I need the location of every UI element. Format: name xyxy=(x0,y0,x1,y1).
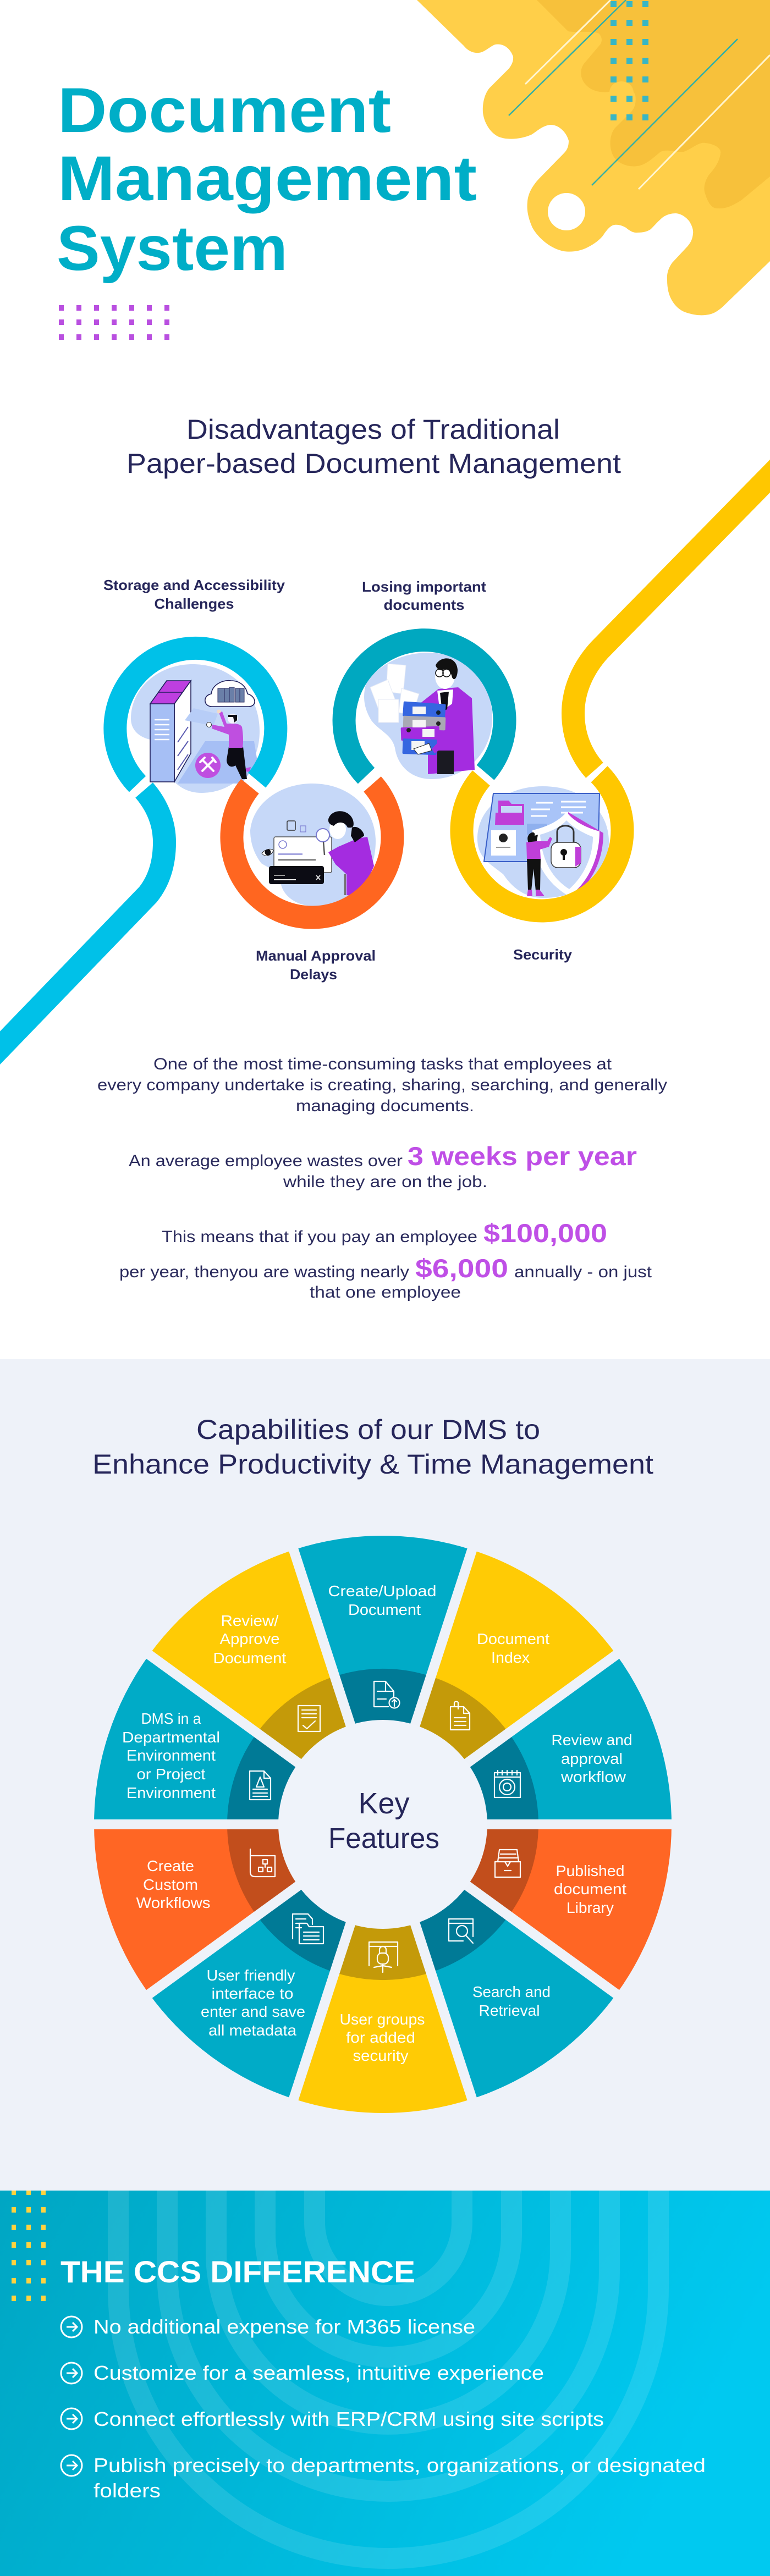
heading: disadvantages xyxy=(127,414,621,479)
wheel separators xyxy=(88,1544,678,2105)
segment: DMS in a departmental environment: Environment xyxy=(127,1784,216,1801)
segment: DMS in a departmental environment: or Project xyxy=(136,1766,206,1783)
heading: the CCS difference: THE CCS DIFFERENCE xyxy=(61,2254,415,2289)
text block: statistics xyxy=(97,1055,667,1301)
segment: user groups for added security: security xyxy=(353,2047,408,2064)
blue connector line xyxy=(0,790,164,1082)
segment: published document library xyxy=(383,1824,672,1994)
heading: capabilities xyxy=(92,1414,653,1480)
icon: documents and folder xyxy=(293,1914,323,1944)
text block: statistics: every company undertake is creating, sharing, searching, and generally xyxy=(97,1076,667,1094)
lighter blob spot xyxy=(609,81,634,103)
icon: calendar cog xyxy=(494,1770,520,1797)
text block: statistics: while they are on the job. xyxy=(283,1173,487,1191)
label: losing: documents xyxy=(384,597,464,613)
segment: create custom workflows: Custom xyxy=(143,1876,198,1893)
text block: statistics: One of the most time-consuming tasks that employees at xyxy=(153,1055,612,1073)
label: manual approval xyxy=(256,947,376,983)
title: Management xyxy=(58,144,477,214)
title: System xyxy=(57,213,288,284)
purple dot grid xyxy=(59,305,169,340)
segment: create custom workflows xyxy=(94,1824,383,1994)
wheel centre: key features: Key xyxy=(358,1787,410,1820)
segment: search and retrieval xyxy=(383,1824,617,2099)
label: manual approval: Manual Approval xyxy=(256,947,376,964)
segment: create/upload document: Document xyxy=(348,1601,421,1618)
yellow dot grid xyxy=(12,2191,46,2301)
heading: disadvantages: Disadvantages of Traditional xyxy=(186,414,560,445)
segment: create/upload document xyxy=(294,1536,472,1824)
segment: document index: Document xyxy=(477,1630,549,1647)
segment: review/approve document xyxy=(149,1550,383,1824)
item: M365 license: No additional expense for M365 license xyxy=(94,2315,475,2338)
segment: published document library: document xyxy=(554,1880,626,1897)
panel: storage and accessibility xyxy=(103,577,285,793)
item: publish: folders xyxy=(94,2479,161,2502)
heading: capabilities: Capabilities of our DMS to xyxy=(196,1414,540,1445)
label: security: Security xyxy=(513,946,573,963)
ring: orange xyxy=(232,784,392,918)
segment: user friendly interface xyxy=(149,1824,383,2099)
icon: upload document xyxy=(374,1681,399,1708)
item: connect: Connect effortlessly with ERP/CRM using site scripts xyxy=(94,2408,604,2430)
segment: user friendly interface: interface to xyxy=(211,1985,294,2002)
segment: review and approval workflow: approval xyxy=(561,1750,623,1767)
label: storage: Challenges xyxy=(154,595,234,612)
text block: statistics: 3 weeks per year xyxy=(408,1141,637,1171)
label: manual approval: Delays xyxy=(290,966,337,983)
segment: search and retrieval: Search and xyxy=(472,1983,551,2000)
panel: the CCS difference xyxy=(0,2191,770,2576)
segment: DMS in a departmental environment: DMS in a xyxy=(141,1710,201,1727)
heading: disadvantages: Paper-based Document Management xyxy=(127,448,621,479)
text block: statistics: An average employee wastes over xyxy=(129,1152,403,1170)
concentric arch pattern xyxy=(118,2191,658,2558)
icon: clipped document xyxy=(450,1702,470,1730)
text block: statistics: per year, thenyou are wasting nearly xyxy=(119,1263,409,1281)
text block: statistics: $6,000 xyxy=(415,1254,508,1283)
label: losing xyxy=(362,578,486,613)
panel: manual approval delays xyxy=(232,784,392,983)
panel: capabilities background xyxy=(0,1359,770,2191)
segment: review/approve document: Review/ xyxy=(221,1612,279,1629)
diagonal lines xyxy=(509,0,770,189)
icon: search window xyxy=(449,1919,473,1943)
ring: teal xyxy=(344,640,505,776)
segment: published document library: Library xyxy=(566,1899,614,1916)
segment: published document library: Published xyxy=(556,1862,625,1879)
text block: statistics: managing documents. xyxy=(296,1097,474,1115)
illustration: man with binders xyxy=(364,653,492,779)
segment: search and retrieval: Retrieval xyxy=(479,2002,540,2019)
segment: user friendly interface: User friendly xyxy=(207,1967,295,1984)
segment: review/approve document: Approve xyxy=(220,1630,279,1647)
segment: document index: Index xyxy=(491,1649,530,1666)
ring: blue xyxy=(115,648,276,784)
title xyxy=(57,75,477,284)
segment: user groups for added security: User groups xyxy=(340,2011,425,2028)
blob hole xyxy=(548,193,585,230)
item: publish xyxy=(61,2454,706,2502)
text block: statistics: that one employee xyxy=(310,1283,461,1301)
ring: yellow xyxy=(461,774,622,911)
darker blob overlay xyxy=(537,0,770,208)
text block: statistics: $100,000 xyxy=(483,1218,607,1248)
segment: user friendly interface: enter and save xyxy=(201,2003,305,2020)
wheel centre: key features xyxy=(278,1720,487,1929)
label: storage: Storage and Accessibility xyxy=(103,577,285,593)
segment: DMS in a departmental environment: Environment xyxy=(127,1747,216,1764)
decorative yellow blob header graphic xyxy=(417,0,770,315)
text block: statistics: annually - on just xyxy=(514,1263,652,1281)
segment: create custom workflows: Workflows xyxy=(136,1894,210,1911)
segment: user groups for added security: for added xyxy=(346,2029,415,2046)
segment: review and approval workflow xyxy=(383,1654,672,1824)
segment: user friendly interface: all metadata xyxy=(208,2022,296,2039)
yellow connector line xyxy=(573,454,770,770)
segment: review and approval workflow: workflow xyxy=(560,1768,626,1785)
segment: create/upload document: Create/Upload xyxy=(328,1582,437,1599)
segment: review/approve document: Document xyxy=(213,1650,287,1667)
segment: user groups for added security xyxy=(294,1824,472,2113)
segment: DMS in a departmental environment xyxy=(94,1654,383,1824)
segment: create custom workflows: Create xyxy=(147,1857,194,1874)
illustration: woman checking document xyxy=(250,784,376,906)
icon: document tree xyxy=(250,1771,271,1800)
icon: padlock window xyxy=(369,1942,398,1972)
teal dot grid xyxy=(610,1,648,120)
panel: losing important documents xyxy=(344,578,505,779)
icon: archive box xyxy=(495,1850,520,1877)
segment: DMS in a departmental environment: Departmental xyxy=(122,1729,220,1746)
text block: statistics: This means that if you pay an employee xyxy=(162,1228,477,1246)
icon: workflow scroll xyxy=(250,1849,275,1877)
label: storage xyxy=(103,577,285,612)
segment: review and approval workflow: Review and xyxy=(551,1731,632,1748)
label: losing: Losing important xyxy=(362,578,486,595)
title: Document xyxy=(58,75,391,146)
heading: capabilities: Enhance Productivity & Time Management xyxy=(92,1449,653,1480)
illustration: server and cloud xyxy=(131,664,260,793)
wheel centre: key features: Features xyxy=(328,1823,439,1855)
icon: check document xyxy=(298,1706,320,1731)
illustration: shield and lock xyxy=(477,786,609,898)
panel: security xyxy=(461,774,622,963)
segment: document index xyxy=(383,1550,617,1824)
item: customize: Customize for a seamless, intuitive experience xyxy=(94,2362,544,2384)
item: publish: Publish precisely to departments, organizations, or designated xyxy=(94,2454,706,2476)
